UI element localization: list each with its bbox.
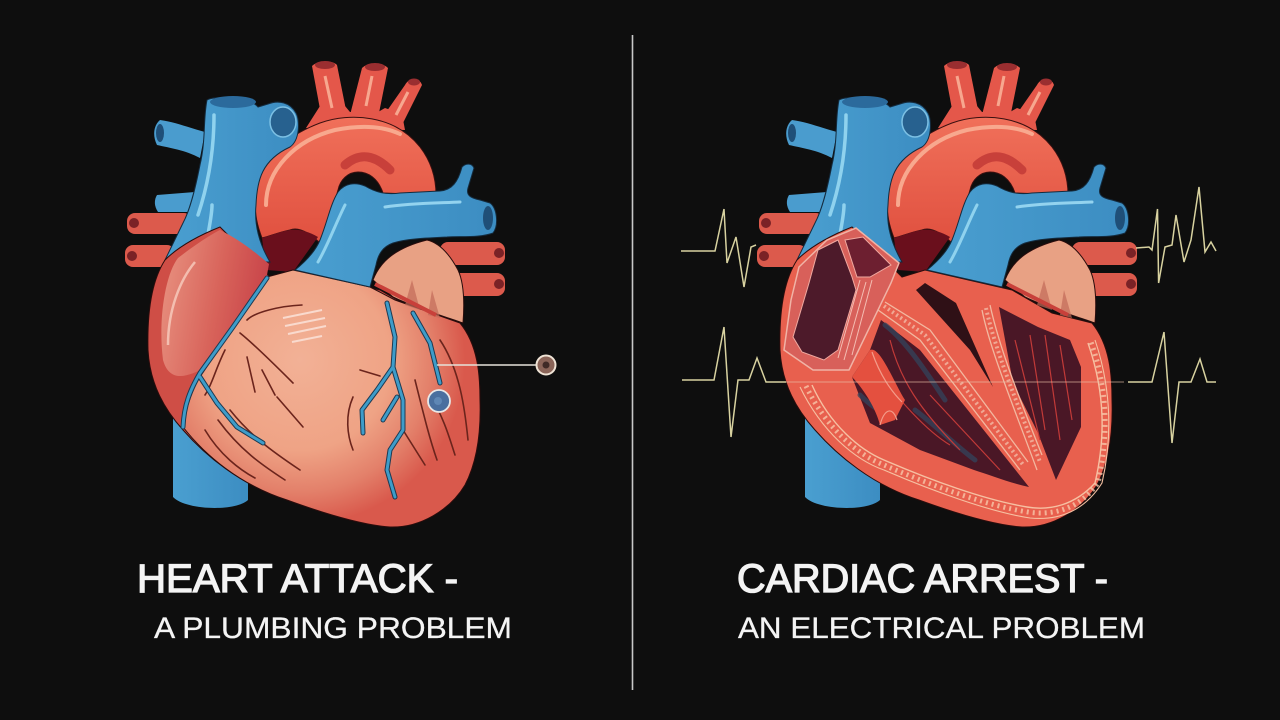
ventricle <box>183 270 480 527</box>
left atrium highlight streaks <box>168 262 195 345</box>
heading: heart attack: HEART ATTACK - <box>137 557 458 601</box>
upper slit <box>916 283 993 387</box>
aortic opening <box>262 230 318 272</box>
papillary muscle <box>852 350 905 425</box>
aortic arch <box>255 117 436 245</box>
ECG trace: upper left <box>681 209 756 287</box>
heart vessels behind <box>125 61 505 508</box>
side arteries <box>125 213 505 296</box>
heart body (right) <box>780 227 1112 527</box>
center divider <box>632 35 634 690</box>
muscle highlight <box>283 310 326 342</box>
ventricle chamber left <box>852 320 1029 487</box>
superior vena cava <box>165 97 298 262</box>
panel: cardiac arrest <box>681 61 1216 645</box>
aortic branches <box>306 61 422 130</box>
callout line and dot <box>437 356 556 374</box>
panel: heart attack <box>125 61 556 645</box>
inferior vena cava <box>173 415 248 508</box>
front vessels <box>295 164 497 323</box>
right atrium lobe <box>161 230 269 376</box>
ECG trace: center line <box>786 381 1124 383</box>
ventricle chamber right <box>999 307 1081 480</box>
septum bands <box>878 302 1042 470</box>
coronary arteries <box>183 278 440 497</box>
ECG trace: lower left <box>682 327 786 437</box>
ECG trace: lower right <box>1128 332 1216 443</box>
heart vessels behind (right) <box>757 61 1137 508</box>
opened atrium <box>784 228 899 370</box>
chamber fibres <box>860 325 975 460</box>
subheading: electrical: AN ELECTRICAL PROBLEM <box>738 612 1145 645</box>
left atrium <box>373 240 464 323</box>
subheading: plumbing: A PLUMBING PROBLEM <box>154 612 512 645</box>
outer wall band <box>812 343 1102 508</box>
heart body <box>148 227 480 527</box>
blockage marker <box>428 390 450 412</box>
ECG trace: upper right <box>1136 187 1216 283</box>
blue side veins <box>154 120 205 212</box>
front vessels (right) <box>927 164 1129 323</box>
heading: cardiac arrest: CARDIAC ARREST - <box>737 557 1108 601</box>
heart chambers <box>784 228 1109 518</box>
pulmonary artery <box>295 164 497 287</box>
coronary veins <box>205 305 468 480</box>
